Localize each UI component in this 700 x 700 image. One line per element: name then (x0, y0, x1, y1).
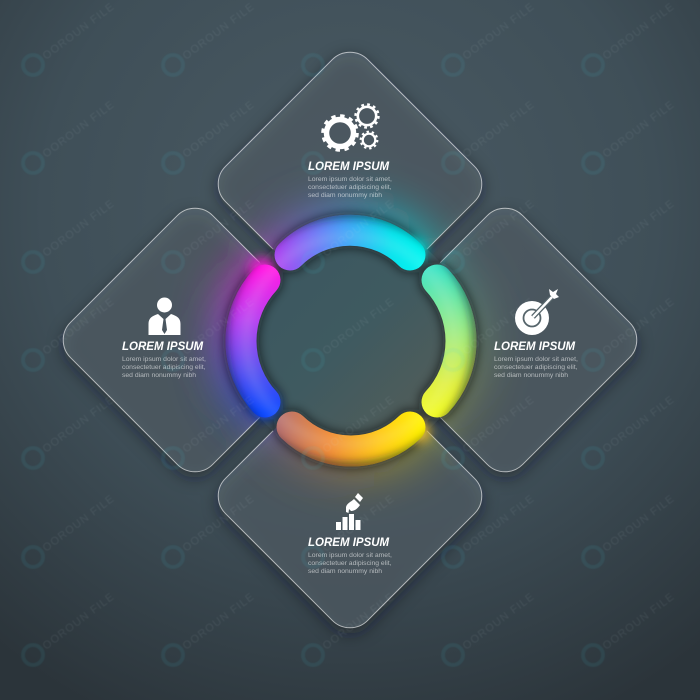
text block: sed diam nonummy nibh (308, 568, 382, 575)
text block (122, 356, 206, 379)
heading: LOREM IPSUM (122, 341, 204, 353)
text block: Lorem ipsum dolor sit amet, (494, 356, 578, 363)
heading: LOREM IPSUM (494, 341, 576, 353)
watermarks: OOROUN FILE (321, 591, 397, 652)
watermarks: OOROUN FILE (321, 296, 397, 357)
segment: bottom (292, 427, 410, 451)
watermarks: OOROUN FILE (461, 99, 537, 160)
ring shadow (241, 230, 461, 451)
watermarks: OOROUN FILE (321, 394, 397, 455)
icon: gears (323, 104, 378, 150)
watermarks: OOROUN FILE (461, 198, 537, 259)
watermarks: OOROUN FILE (461, 591, 537, 652)
panel shadows (53, 46, 647, 644)
panel: left (62, 208, 260, 472)
icon: person (148, 298, 180, 335)
segment: top (290, 230, 410, 255)
icon: target with dart (515, 289, 559, 335)
watermarks: OOROUN FILE (41, 1, 117, 62)
watermarks: OOROUN FILE (601, 591, 677, 652)
icon: hand over bar chart (336, 493, 363, 530)
panel: glass tint glow from ring (64, 52, 636, 628)
text block: consectetuer adipiscing elit, (308, 184, 392, 191)
watermarks: OOROUN FILE (321, 198, 397, 259)
watermarks: OOROUN FILE (181, 296, 257, 357)
watermarks: OOROUN FILE (601, 296, 677, 357)
watermarks: OOROUN FILE (181, 1, 257, 62)
watermarks: OOROUN FILE (181, 198, 257, 259)
text block: sed diam nonummy nibh (122, 372, 196, 379)
heading: LOREM IPSUM (308, 161, 390, 173)
text block: sed diam nonummy nibh (494, 372, 568, 379)
text block: Lorem ipsum dolor sit amet, (308, 552, 392, 559)
watermarks: OOROUN FILE (181, 99, 257, 160)
panel: right (440, 208, 638, 472)
watermarks: OOROUN FILE (601, 1, 677, 62)
watermarks: OOROUN FILE (41, 198, 117, 259)
ring shading (222, 212, 478, 468)
text block: Lorem ipsum dolor sit amet, (308, 176, 392, 183)
watermarks: OOROUN FILE (41, 296, 117, 357)
watermarks: OOROUN FILE (41, 99, 117, 160)
segment: right (437, 280, 461, 402)
panel outlines (53, 42, 647, 638)
panel content: left (122, 298, 206, 379)
watermarks: OOROUN FILE (181, 493, 257, 554)
watermarks: OOROUN FILE (41, 394, 117, 455)
watermarks: OOROUN FILE (181, 591, 257, 652)
watermarks: OOROUN FILE (41, 493, 117, 554)
panel content: bottom (308, 493, 392, 575)
watermarks: OOROUN FILE (461, 394, 537, 455)
watermarks: OOROUN FILE (321, 493, 397, 554)
heading: LOREM IPSUM (308, 537, 390, 549)
panel: bottom (218, 430, 482, 628)
segment: left (241, 280, 265, 402)
watermarks: OOROUN FILE (601, 394, 677, 455)
text block (308, 176, 392, 199)
watermarks: OOROUN FILE (601, 198, 677, 259)
watermarks: OOROUN FILE (601, 99, 677, 160)
watermarks: OOROUN FILE (601, 493, 677, 554)
ring centre (238, 228, 462, 452)
panel content: top (308, 104, 392, 199)
watermarks: OOROUN FILE (461, 493, 537, 554)
text block: consectetuer adipiscing elit, (308, 560, 392, 567)
watermarks: OOROUN FILE (181, 394, 257, 455)
panel content: right (494, 289, 578, 379)
text block: sed diam nonummy nibh (308, 192, 382, 199)
watermarks: OOROUN FILE (461, 296, 537, 357)
text block (308, 552, 392, 575)
donut chart ring (241, 230, 461, 451)
text block (494, 356, 578, 379)
watermarks: OOROUN FILE (41, 591, 117, 652)
text block: consectetuer adipiscing elit, (122, 364, 206, 371)
watermarks: OOROUN FILE (461, 1, 537, 62)
panel: top (218, 52, 482, 250)
text block: Lorem ipsum dolor sit amet, (122, 356, 206, 363)
text block: consectetuer adipiscing elit, (494, 364, 578, 371)
end glows (249, 237, 431, 443)
